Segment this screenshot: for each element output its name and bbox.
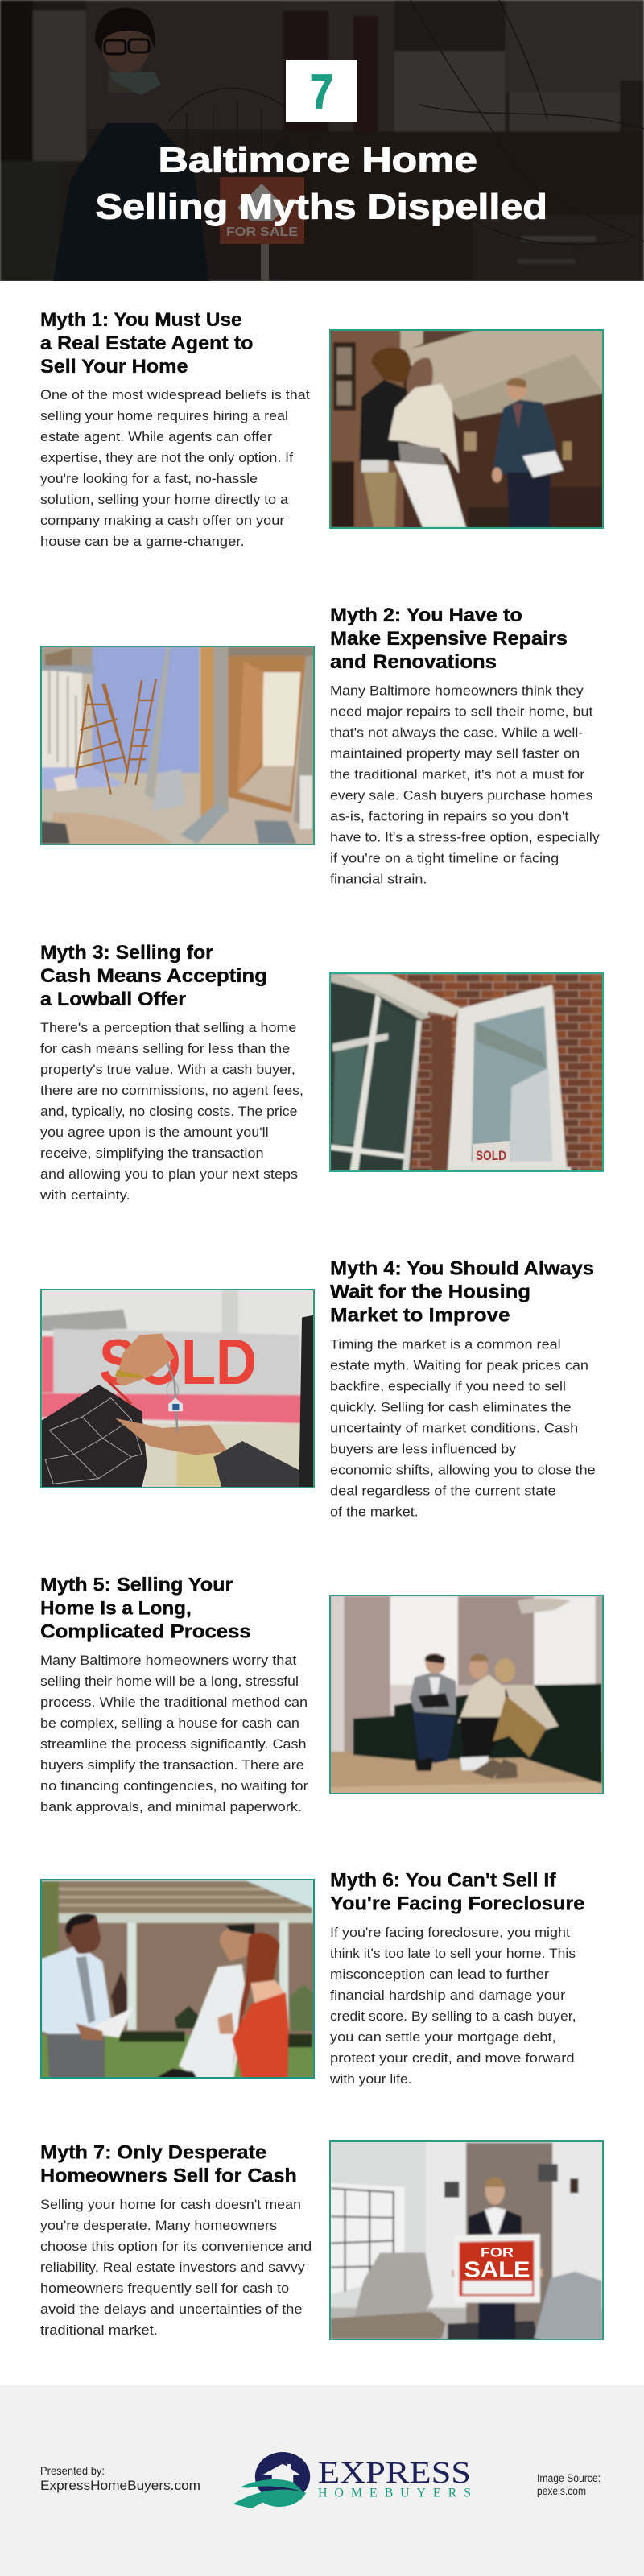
body text: myth 1: house can be a game-changer. bbox=[40, 535, 245, 549]
heading: myth 2: Myth 2: You Have to bbox=[330, 605, 522, 626]
body text: myth 4: of the market. bbox=[330, 1505, 419, 1519]
panel: myth 5 bbox=[40, 1575, 604, 1814]
body text: myth 6: with your life. bbox=[329, 2072, 412, 2087]
logo wordmark bbox=[318, 2456, 471, 2500]
presented by bbox=[40, 2465, 200, 2493]
for sale sign bbox=[220, 177, 304, 244]
heading: myth 7: Homeowners Sell for Cash bbox=[40, 2165, 297, 2187]
body text: myth 5: streamline the process significantly. Cash bbox=[40, 1737, 307, 1752]
title: Baltimore Home bbox=[158, 140, 477, 180]
heading: myth 3: a Lowball Offer bbox=[40, 989, 186, 1010]
body text: myth 2: Many Baltimore homeowners think they bbox=[330, 683, 584, 698]
body text: myth 7: choose this option for its convenience and bbox=[40, 2240, 312, 2254]
image source: pexels.com bbox=[537, 2485, 586, 2497]
panel: myth 2 bbox=[40, 605, 600, 886]
heading: myth 1: a Real Estate Agent to bbox=[40, 332, 253, 354]
number badge bbox=[286, 60, 357, 122]
body text: myth 6: financial hardship and damage your bbox=[330, 1988, 566, 2003]
body text: myth 4: buyers are less influenced by bbox=[330, 1442, 517, 1456]
body text: myth 1: expertise, they are not the only option. If bbox=[40, 451, 293, 465]
body text: myth 3: and, typically, no closing costs. The price bbox=[40, 1104, 297, 1119]
heading: myth 1: Sell Your Home bbox=[40, 356, 188, 378]
body text: myth 5: process. While the traditional method can bbox=[40, 1695, 308, 1710]
fence and branches bbox=[169, 0, 644, 245]
photo: key handover in front of sold sign bbox=[40, 1289, 315, 1488]
body text: myth 7: Selling your home for cash doesn't mean bbox=[40, 2198, 301, 2212]
logo wordmark: HOMEBUYERS bbox=[318, 2486, 471, 2500]
body text: myth 7: you're desperate. Many homeowners bbox=[40, 2219, 277, 2233]
body text: myth 2: maintained property may sell faster on bbox=[330, 746, 580, 761]
for sale sign lettering: FOR bbox=[481, 2244, 514, 2260]
body text: myth 1: you're looking for a fast, no-hassle bbox=[40, 472, 258, 486]
body text: myth 4: economic shifts, allowing you to close the bbox=[330, 1463, 596, 1477]
sold sign lettering: SOLD bbox=[99, 1326, 257, 1397]
logo mark: house and swoosh bbox=[233, 2452, 310, 2508]
heading: myth 5: Home Is a Long, bbox=[40, 1598, 192, 1620]
heading: myth 6: Myth 6: You Can't Sell If bbox=[330, 1869, 557, 1891]
body text: myth 4: uncertainty of market conditions. Cash bbox=[330, 1421, 578, 1435]
body text: myth 4: Timing the market is a common real bbox=[330, 1337, 561, 1352]
body text: myth 3: you agree upon is the amount you'll bbox=[40, 1125, 269, 1140]
body text: myth 7: homeowners frequently sell for cash to bbox=[40, 2281, 289, 2296]
heading: myth 7 bbox=[40, 2142, 297, 2187]
body text: myth 6: think it's too late to sell your home. This bbox=[330, 1946, 576, 1961]
body text: myth 7: traditional market. bbox=[40, 2323, 158, 2338]
heading: myth 3: Myth 3: Selling for bbox=[40, 942, 213, 964]
heading: myth 3: Cash Means Accepting bbox=[40, 965, 267, 987]
body text: myth 7: reliability. Real estate investors and savvy bbox=[40, 2260, 305, 2275]
heading: myth 1 bbox=[40, 309, 253, 378]
header banner bbox=[0, 0, 644, 281]
heading: myth 4: Myth 4: You Should Always bbox=[330, 1257, 594, 1279]
body text: myth 6: misconception can lead to further bbox=[330, 1967, 550, 1982]
title bbox=[95, 140, 547, 227]
title: Selling Myths Dispelled bbox=[95, 187, 547, 227]
body text: myth 2: that's not always the case. While a well- bbox=[330, 725, 583, 740]
body text: myth 1 bbox=[40, 388, 310, 549]
body text: myth 7: avoid the delays and uncertainties of the bbox=[40, 2302, 303, 2317]
body text: myth 3: with certainty. bbox=[39, 1188, 130, 1203]
sold sign bbox=[473, 1141, 510, 1164]
body text: myth 1: selling your home requires hiring a real bbox=[40, 409, 288, 423]
body text: myth 7 bbox=[40, 2198, 312, 2338]
panel: myth 1 bbox=[40, 309, 604, 549]
body text: myth 5: selling their home will be a long, stressful bbox=[40, 1674, 299, 1689]
heading: myth 2 bbox=[330, 605, 568, 673]
body text: myth 3 bbox=[39, 1021, 303, 1203]
body text: myth 1: estate agent. While agents can offer bbox=[40, 430, 273, 444]
heading: myth 6: You're Facing Foreclosure bbox=[330, 1893, 584, 1914]
body text: myth 4: quickly. Selling for cash eliminates the bbox=[330, 1400, 572, 1414]
body text: myth 5: Many Baltimore homeowners worry that bbox=[40, 1653, 297, 1668]
logo wordmark: EXPRESS bbox=[318, 2456, 471, 2490]
heading: myth 4: Market to Improve bbox=[330, 1304, 510, 1326]
body text: myth 1: solution, selling your home directly to a bbox=[40, 493, 289, 507]
image source: Image Source: bbox=[537, 2472, 601, 2484]
body text: myth 1: One of the most widespread beliefs is that bbox=[40, 388, 310, 402]
heading: myth 5: Complicated Process bbox=[40, 1621, 251, 1643]
heading: myth 7: Myth 7: Only Desperate bbox=[40, 2142, 266, 2164]
footer bbox=[0, 2385, 644, 2576]
body text: myth 1: company making a cash offer on your bbox=[40, 514, 285, 528]
body text: myth 6: credit score. By selling to a cash buyer, bbox=[330, 2009, 576, 2024]
body text: myth 3: property's true value. With a cash buyer, bbox=[40, 1063, 295, 1077]
body text: myth 2: financial strain. bbox=[330, 872, 427, 886]
photo: house under renovation bbox=[40, 646, 315, 845]
presented by: ExpressHomeBuyers.com bbox=[40, 2478, 200, 2493]
body text: myth 2 bbox=[330, 683, 600, 886]
presented by: Presented by: bbox=[40, 2465, 105, 2477]
panel: myth 3 bbox=[39, 942, 604, 1203]
body text: myth 2: if you're on a tight timeline or facing bbox=[330, 851, 559, 865]
photo: agent greeting couple bbox=[329, 329, 604, 529]
body text: myth 4: estate myth. Waiting for peak prices can bbox=[330, 1358, 588, 1373]
heading: myth 3 bbox=[40, 942, 267, 1010]
hands and key bbox=[41, 1315, 315, 1488]
body text: myth 5: buyers simplify the transaction. There are bbox=[40, 1758, 304, 1773]
woman with sign bbox=[53, 8, 269, 281]
body text: myth 2: the traditional market, it's not a must for bbox=[330, 767, 585, 782]
body text: myth 2: every sale. Cash buyers purchase homes bbox=[330, 788, 592, 803]
body text: myth 2: as-is, factoring in repairs so you don't bbox=[330, 809, 569, 824]
body text: myth 6: protect your credit, and move forward bbox=[330, 2051, 575, 2066]
body text: myth 6 bbox=[329, 1926, 576, 2087]
heading: myth 5 bbox=[40, 1575, 251, 1643]
body text: myth 5: no financing contingencies, no waiting for bbox=[40, 1779, 308, 1794]
body text: myth 4: backfire, especially if you need to sell bbox=[330, 1379, 566, 1393]
photo: woman holding for sale sign bbox=[329, 2140, 604, 2340]
body text: myth 3: receive, simplifying the transaction bbox=[40, 1146, 264, 1161]
panel: myth 7 bbox=[40, 2140, 604, 2340]
body text: myth 6: you can settle your mortgage debt, bbox=[330, 2030, 556, 2045]
body text: myth 2: need major repairs to sell their home, but bbox=[330, 704, 593, 719]
body text: myth 3: There's a perception that selling a home bbox=[40, 1021, 296, 1035]
banner background photo bbox=[0, 0, 644, 281]
body text: myth 5: bank approvals, and minimal paperwork. bbox=[40, 1800, 302, 1814]
panel: myth 6 bbox=[40, 1869, 584, 2087]
body text: myth 3: and allowing you to plan your next steps bbox=[40, 1167, 298, 1182]
for sale sign lettering: SALE bbox=[464, 2256, 530, 2281]
ladders bbox=[76, 679, 156, 795]
body text: myth 5: be complex, selling a house for cash can bbox=[40, 1716, 299, 1731]
photo: couple with agent on sofa bbox=[329, 1595, 604, 1794]
for sale sign lettering bbox=[464, 2244, 530, 2281]
body text: myth 2: have to. It's a stress-free option, especially bbox=[330, 830, 600, 844]
heading: myth 4: Wait for the Housing bbox=[330, 1281, 530, 1302]
logo bbox=[233, 2452, 471, 2508]
photo: agent and couple outside a house bbox=[40, 1879, 315, 2079]
image source bbox=[537, 2472, 601, 2497]
number badge: 7 bbox=[310, 64, 333, 118]
body text: myth 4: deal regardless of the current state bbox=[330, 1484, 556, 1498]
heading: myth 2: and Renovations bbox=[330, 651, 497, 673]
body text: myth 3: for cash means selling for less than the bbox=[40, 1042, 290, 1056]
body text: myth 6: If you're facing foreclosure, you might bbox=[330, 1926, 570, 1940]
body text: myth 3: there are no commissions, no agent fees, bbox=[40, 1084, 303, 1098]
heading: myth 4 bbox=[330, 1257, 594, 1326]
heading: myth 5: Myth 5: Selling Your bbox=[40, 1575, 233, 1596]
heading: myth 6 bbox=[330, 1869, 584, 1914]
sold sign: SOLD bbox=[476, 1148, 506, 1163]
body text: myth 4 bbox=[330, 1337, 596, 1519]
body text: myth 5 bbox=[40, 1653, 308, 1814]
heading: myth 2: Make Expensive Repairs bbox=[330, 628, 568, 650]
heading: myth 1: Myth 1: You Must Use bbox=[40, 309, 242, 331]
photo: brick house window with sold sign bbox=[329, 972, 604, 1172]
panel: myth 4 bbox=[40, 1257, 596, 1519]
for sale sign: FOR SALE bbox=[226, 225, 298, 239]
